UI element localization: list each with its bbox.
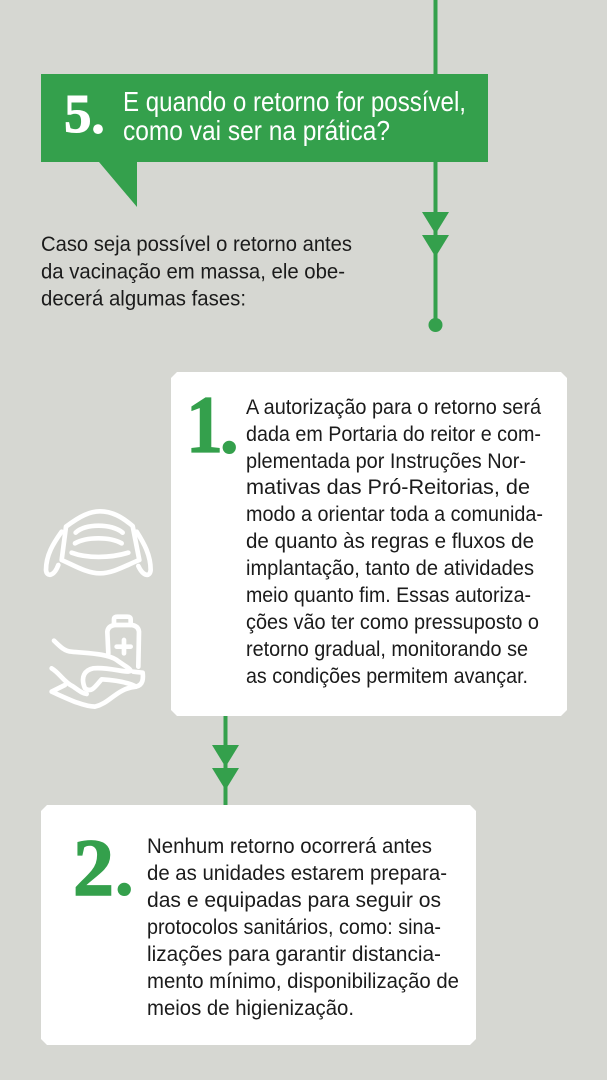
text block: step 2: de as unidades estarem prepara- [147,861,447,885]
text block: intro: decerá algumas fases: [41,286,246,310]
number 1: . [219,380,240,471]
heading: E quando o retorno for possível, [123,86,466,117]
text block: step 1: de quanto às regras e fluxos de [246,529,534,553]
text block: intro: da vacinação em massa, ele obe- [41,260,345,284]
number 1: 1 [186,379,223,470]
text block: step 2: mento mínimo, disponibilização de [147,969,459,993]
panel: question 5 speech bubble [41,74,488,207]
text block: step 1: mativas das Pró-Reitorias, de [246,475,530,499]
text block: step 1: modo a orientar toda a comunida- [246,502,543,526]
text block: step 1: plementada por Instruções Nor- [246,449,526,473]
text block: step 1: retorno gradual, monitorando se [246,637,528,661]
text block: intro [41,232,352,310]
panel: step 1 card [171,372,567,716]
heading [123,86,466,146]
icon: face mask [46,511,151,575]
text block: intro: Caso seja possível o retorno antes [41,232,352,256]
panel: step 2 card [41,805,476,1045]
number 5: . [90,80,106,146]
text block: step 2 [147,834,459,1020]
number 5: 5 [64,83,92,144]
number 2 [73,822,134,913]
text block: step 2: meios de higienização. [147,996,354,1020]
text block: step 1: implantação, tanto de atividades [246,556,534,580]
icon: hand with sanitizer bottle [52,617,143,707]
number 2: 2 [73,822,114,913]
number 2: . [114,822,134,913]
text block: step 1: as condições permitem avançar. [246,664,528,688]
text block: step 2: lizações para garantir distancia- [147,942,441,966]
heading: como vai ser na prática? [123,115,390,146]
text block: step 2: Nenhum retorno ocorrerá antes [147,834,432,858]
arrow: connector between step cards [212,716,239,805]
text block: step 1: A autorização para o retorno será [246,395,541,419]
text block: step 1: ções vão ter como pressuposto o [246,610,539,634]
text block: step 1: dada em Portaria do reitor e com- [246,422,541,446]
text block: step 1 [246,395,543,688]
text block: step 1: meio quanto fim. Essas autoriza- [246,583,531,607]
arrow: top connector with double arrowhead and end dot [422,0,449,332]
text block: step 2: protocolos sanitários, como: sina- [147,915,441,939]
text block: step 2: das e equipadas para seguir os [147,888,441,912]
number 5 [64,80,106,146]
